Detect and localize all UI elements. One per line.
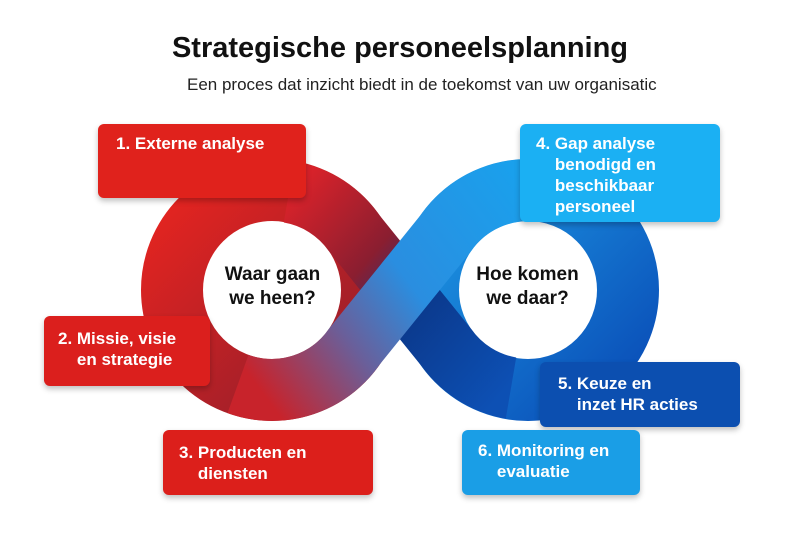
box 3 [163, 430, 373, 495]
box 1: 1. Externe analyse [116, 134, 264, 153]
box 2 [44, 316, 210, 386]
question right: Hoe komen [476, 264, 579, 285]
box 2: 2. Missie, visie [58, 329, 176, 348]
question left: we heen? [229, 288, 316, 309]
box 6 [462, 430, 640, 495]
box 4: benodigd en [555, 155, 656, 174]
question right [476, 264, 579, 309]
question right: we daar? [486, 288, 569, 309]
subtitle: Een proces dat inzicht biedt in de toekomst van uw organisatic [187, 75, 657, 94]
box 1 [98, 124, 306, 198]
box 3: diensten [198, 464, 268, 483]
box 2: en strategie [77, 350, 172, 369]
box 4: 4. Gap analyse [536, 134, 655, 153]
box 6: 6. Monitoring en [478, 441, 609, 460]
box 4 [520, 124, 720, 222]
box 6: evaluatie [497, 462, 570, 481]
title: Strategische personeelsplanning [172, 32, 628, 64]
box 5 [540, 362, 740, 427]
box 4: beschikbaar [555, 176, 654, 195]
box 5: inzet HR acties [577, 395, 698, 414]
box 5: 5. Keuze en [558, 374, 652, 393]
question left [224, 264, 320, 309]
box 4: personeel [555, 197, 635, 216]
box 3: 3. Producten en [179, 443, 307, 462]
question left: Waar gaan [225, 264, 320, 285]
